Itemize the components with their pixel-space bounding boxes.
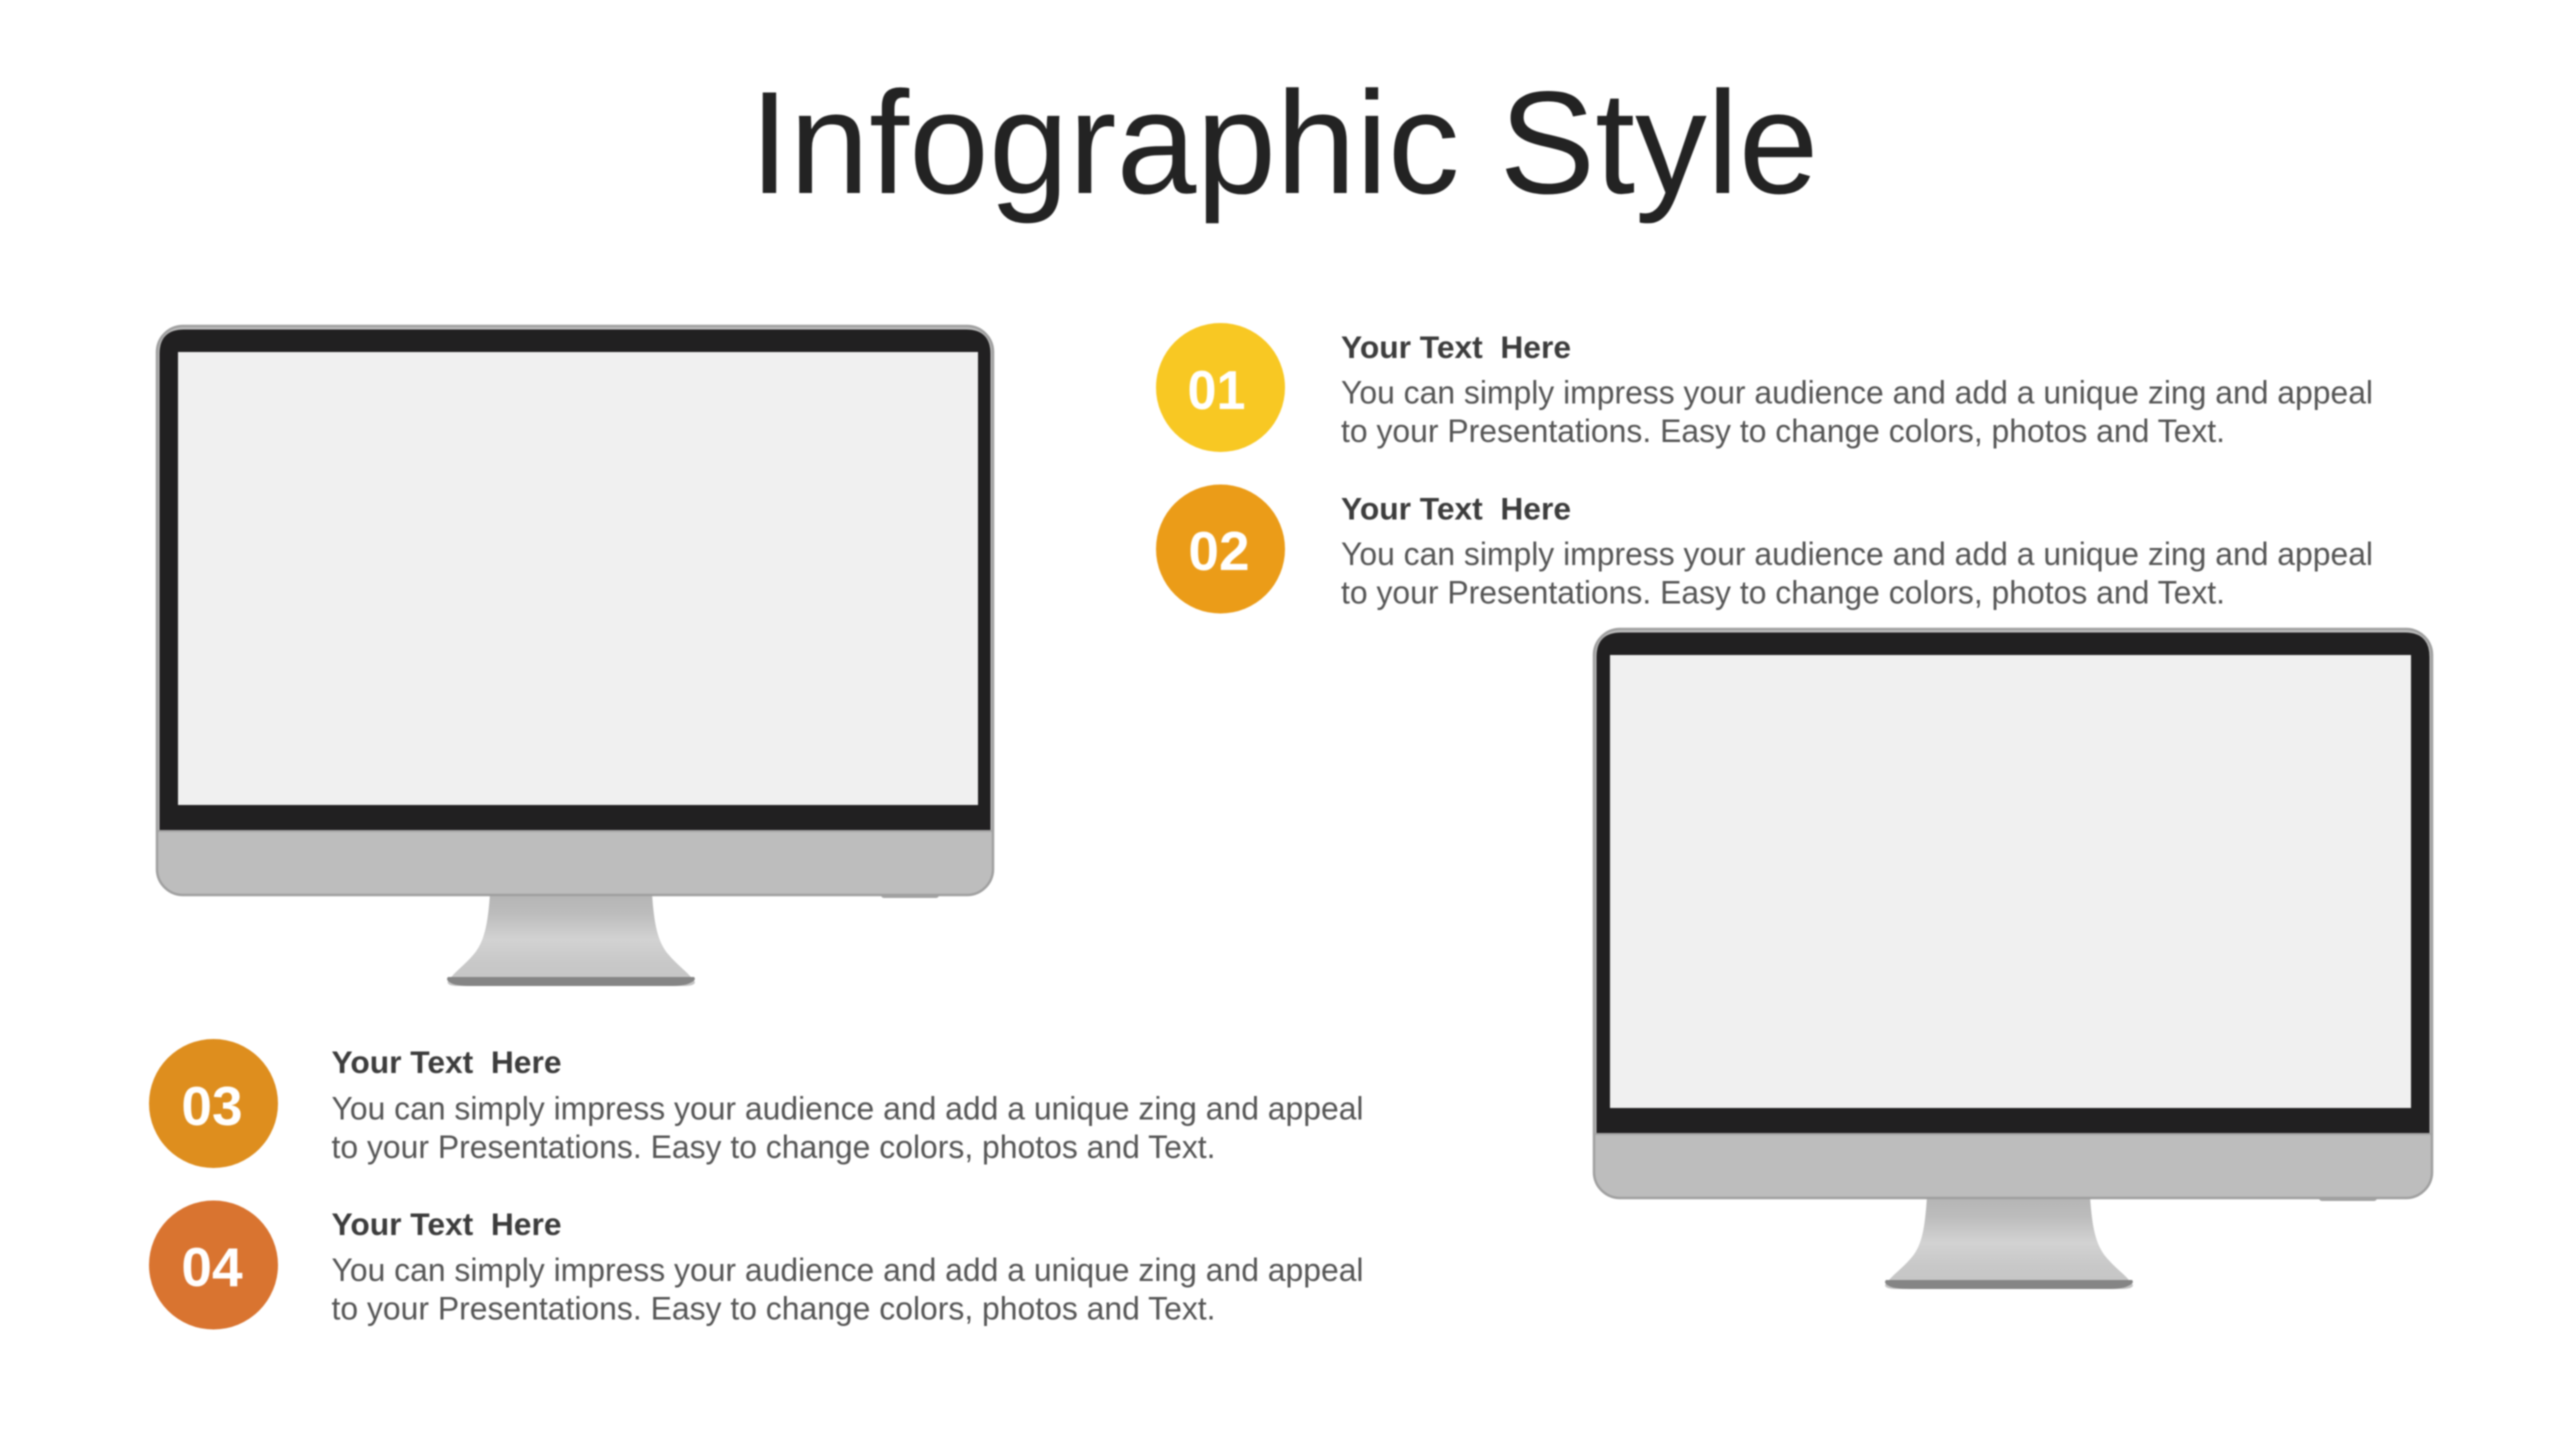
monitor foot button bbox=[881, 890, 939, 898]
heading 02: Your Text Here bbox=[1341, 490, 1571, 526]
item 02 bbox=[1156, 484, 2373, 614]
monitor foot button bbox=[2319, 1193, 2377, 1201]
body 04 bbox=[332, 1252, 1364, 1326]
heading 01: Your Text Here bbox=[1341, 329, 1571, 365]
body 03: to your Presentations. Easy to change colors, photos and Text. bbox=[332, 1129, 1216, 1165]
body 04: You can simply impress your audience and add a unique zing and appeal bbox=[332, 1252, 1364, 1288]
body 03: You can simply impress your audience and add a unique zing and appeal bbox=[332, 1090, 1364, 1126]
title: Infographic Style bbox=[750, 61, 1818, 224]
panel: monitor left bbox=[157, 326, 993, 986]
heading 04: Your Text Here bbox=[332, 1206, 562, 1242]
badge 02: 02 bbox=[1188, 520, 1250, 582]
monitor stand bbox=[1885, 1196, 2133, 1289]
body 01: to your Presentations. Easy to change colors, photos and Text. bbox=[1341, 413, 2225, 449]
monitor screen bbox=[178, 352, 978, 805]
monitor bezel bbox=[160, 330, 990, 830]
body 03 bbox=[332, 1090, 1364, 1165]
monitor body bbox=[1594, 629, 2432, 1198]
badge 02 bbox=[1156, 484, 1285, 614]
badge 04 bbox=[149, 1200, 278, 1330]
heading 03: Your Text Here bbox=[332, 1044, 562, 1080]
badge 01 bbox=[1156, 323, 1285, 452]
item 01 bbox=[1156, 323, 2373, 452]
body 02: to your Presentations. Easy to change colors, photos and Text. bbox=[1341, 574, 2225, 610]
monitor screen bbox=[1610, 655, 2411, 1108]
body 02: You can simply impress your audience and add a unique zing and appeal bbox=[1341, 536, 2373, 572]
badge 03 bbox=[149, 1039, 278, 1168]
badge 01: 01 bbox=[1188, 359, 1246, 421]
monitor stand bbox=[447, 893, 695, 986]
badge 04: 04 bbox=[181, 1236, 243, 1298]
item 03 bbox=[149, 1039, 1364, 1168]
monitor chin line bbox=[1595, 1133, 2431, 1135]
badge 03: 03 bbox=[181, 1075, 243, 1137]
body 01 bbox=[1341, 374, 2373, 449]
body 01: You can simply impress your audience and add a unique zing and appeal bbox=[1341, 374, 2373, 410]
body 04: to your Presentations. Easy to change colors, photos and Text. bbox=[332, 1290, 1216, 1326]
body 02 bbox=[1341, 536, 2373, 610]
item 04 bbox=[149, 1200, 1364, 1330]
monitor body bbox=[157, 326, 993, 895]
panel: monitor right bbox=[1594, 629, 2432, 1289]
monitor chin line bbox=[158, 830, 992, 832]
monitor bezel bbox=[1596, 632, 2430, 1133]
